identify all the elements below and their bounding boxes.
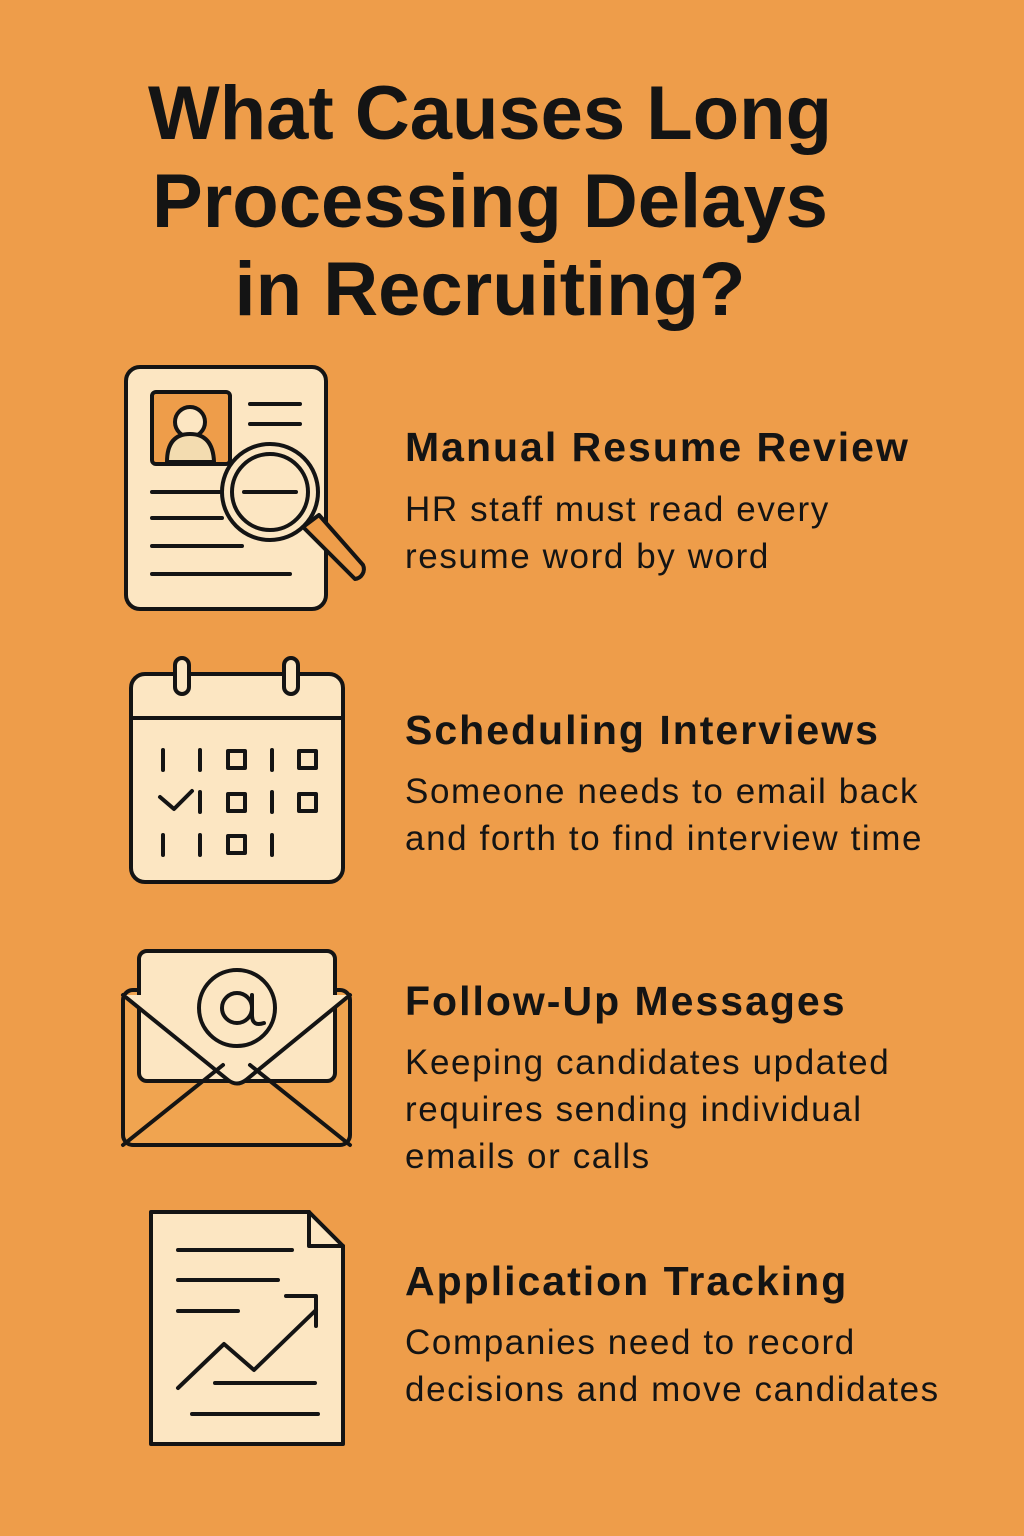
body: follow-up messages bbox=[405, 1043, 890, 1176]
icon: envelope bbox=[123, 951, 350, 1145]
body: application tracking bbox=[405, 1323, 940, 1409]
body: manual resume review bbox=[405, 490, 830, 576]
body: follow-up messages: requires sending individual bbox=[405, 1090, 863, 1129]
heading: manual resume review: Manual Resume Review bbox=[405, 424, 910, 470]
title: in Recruiting? bbox=[235, 247, 745, 332]
title bbox=[148, 71, 832, 332]
body: follow-up messages: emails or calls bbox=[405, 1137, 651, 1176]
icon: document chart bbox=[151, 1212, 343, 1444]
title: What Causes Long bbox=[148, 71, 832, 156]
heading: scheduling interviews: Scheduling Interviews bbox=[405, 707, 880, 753]
body: application tracking: decisions and move candidates bbox=[405, 1370, 940, 1409]
body: scheduling interviews bbox=[405, 772, 923, 858]
heading: application tracking: Application Tracking bbox=[405, 1258, 848, 1304]
heading: follow-up messages: Follow-Up Messages bbox=[405, 978, 847, 1024]
body: scheduling interviews: Someone needs to email back bbox=[405, 772, 919, 811]
body: application tracking: Companies need to record bbox=[405, 1323, 856, 1362]
body: manual resume review: resume word by word bbox=[405, 537, 770, 576]
body: manual resume review: HR staff must read every bbox=[405, 490, 830, 529]
icon: calendar bbox=[131, 658, 343, 882]
body: follow-up messages: Keeping candidates updated bbox=[405, 1043, 890, 1082]
title: Processing Delays bbox=[152, 159, 828, 244]
body: scheduling interviews: and forth to find interview time bbox=[405, 819, 923, 858]
icon: resume with magnifier bbox=[126, 367, 364, 609]
